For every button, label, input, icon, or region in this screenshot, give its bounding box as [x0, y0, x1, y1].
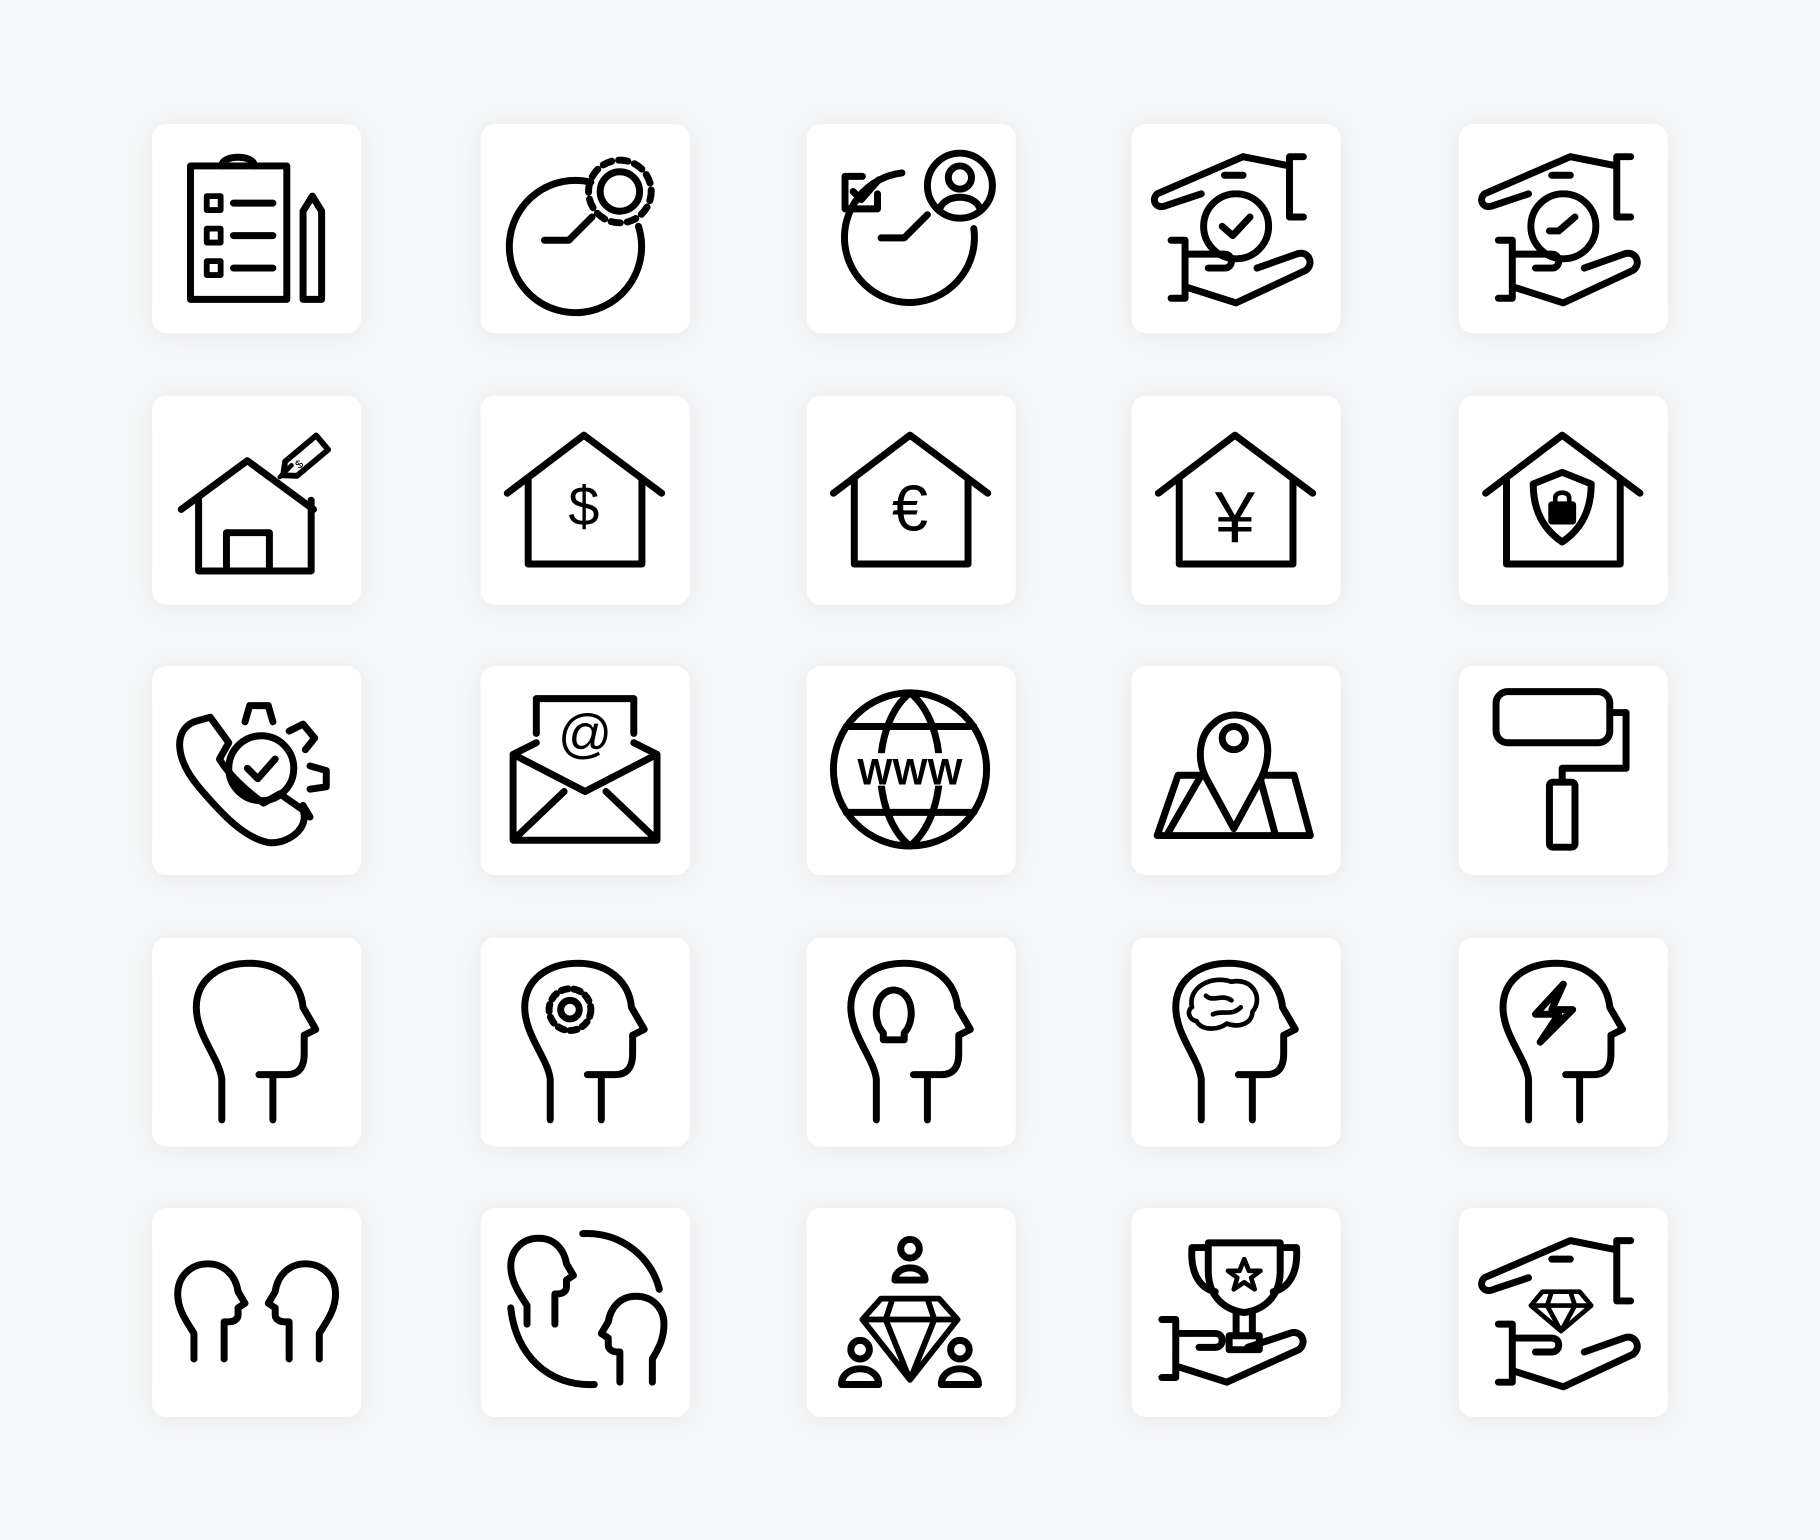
icon: head brain [1132, 938, 1341, 1147]
icon: house dollar: $ [568, 476, 599, 538]
icon: house euro [807, 396, 1016, 605]
icon: heads cycle [481, 1208, 690, 1417]
icon: house price tag [152, 396, 361, 605]
icon: hands clock check [1132, 124, 1341, 333]
icon: two heads [152, 1208, 361, 1417]
icon: trophy hand [1132, 1208, 1341, 1417]
icon: map pin [1132, 666, 1341, 875]
icon: clipboard [152, 124, 361, 333]
icon: head lightning [1459, 938, 1668, 1147]
icon: hands diamond [1459, 1208, 1668, 1417]
icon: head [152, 938, 361, 1147]
icon: diamond team [807, 1208, 1016, 1417]
icon: email: @ [558, 705, 612, 764]
icon: house yen [1132, 396, 1341, 605]
icon: globe www: WWW [857, 751, 963, 793]
icon: clock gear [481, 124, 690, 333]
icon: house price tag: $ [293, 457, 307, 472]
icon: hands clock [1459, 124, 1668, 333]
icon: email [481, 666, 690, 875]
icon: head gear [481, 938, 690, 1147]
icon: house shield [1459, 396, 1668, 605]
icon: house euro: € [892, 471, 928, 544]
icon: globe www [807, 666, 1016, 875]
icon: clock user [807, 124, 1016, 333]
icon: house dollar [481, 396, 690, 605]
icon: house yen: ¥ [1214, 478, 1256, 558]
icon: paint roller [1459, 666, 1668, 875]
icon: head bulb [807, 938, 1016, 1147]
icon: phone support [152, 666, 361, 875]
